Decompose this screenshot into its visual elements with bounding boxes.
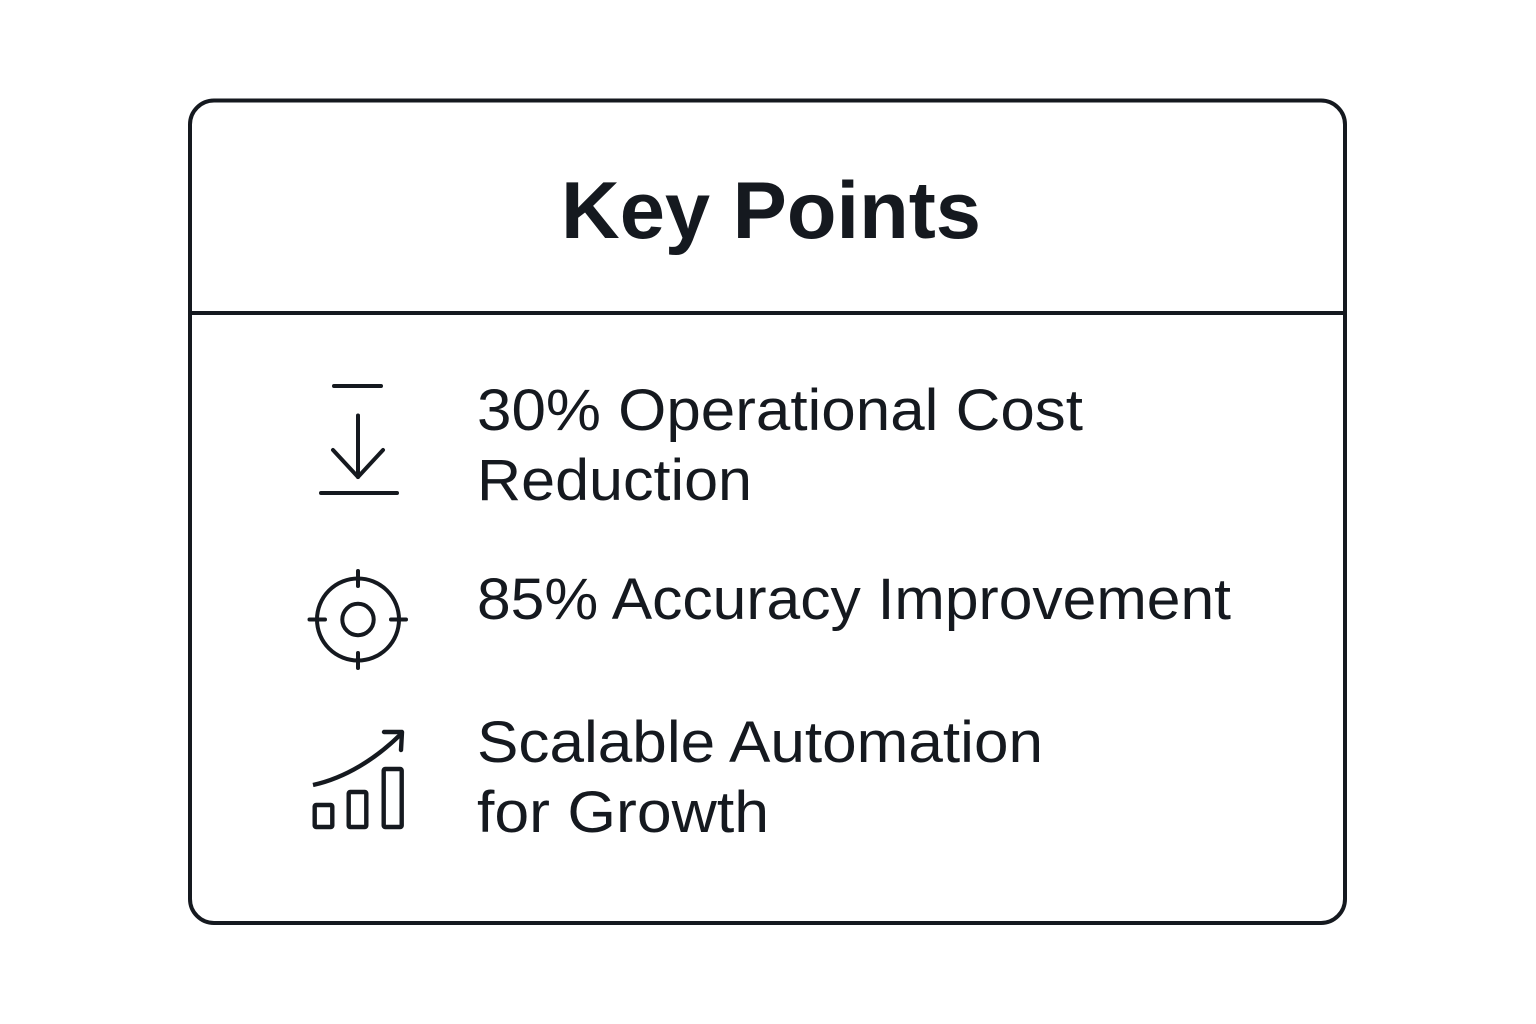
text: 30% operational cost reduction: Reduction bbox=[477, 448, 752, 513]
text: 30% operational cost reduction bbox=[477, 378, 1083, 513]
text: scalable automation for growth: for Growth bbox=[477, 780, 769, 845]
icon: growth chart bbox=[313, 732, 402, 827]
text: scalable automation for growth: Scalable Automation bbox=[477, 710, 1043, 775]
text: scalable automation for growth bbox=[477, 710, 1043, 845]
text: 85% accuracy improvement: 85% Accuracy Improvement bbox=[477, 567, 1231, 632]
icon: accuracy target bbox=[310, 571, 406, 668]
text: 30% operational cost reduction: 30% Operational Cost bbox=[477, 378, 1083, 443]
panel: key points card bbox=[190, 100, 1345, 923]
icon: cost reduction down arrow bbox=[321, 386, 397, 493]
title: Key Points bbox=[561, 166, 981, 256]
